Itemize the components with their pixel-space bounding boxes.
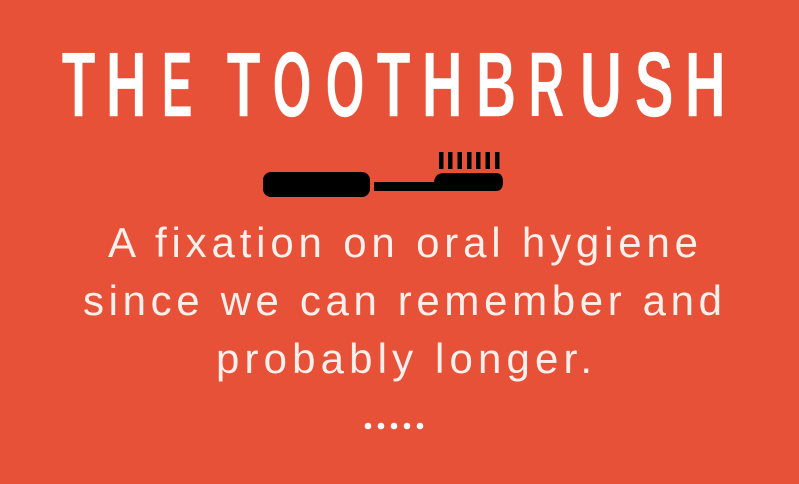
head bbox=[434, 173, 503, 191]
bristles bbox=[439, 152, 500, 169]
neck bbox=[374, 182, 438, 191]
title: B bbox=[476, 34, 516, 137]
subtitle text: A fixation on oral hygiene bbox=[108, 219, 698, 266]
title: E bbox=[162, 32, 193, 137]
icon: toothbrush bbox=[263, 152, 503, 197]
title: H bbox=[106, 33, 147, 137]
subtitle text: since we can remember and bbox=[83, 277, 722, 324]
subtitle text bbox=[83, 219, 722, 382]
dots bbox=[365, 423, 423, 429]
title: T bbox=[226, 34, 261, 137]
title: T bbox=[62, 34, 96, 137]
title: O bbox=[272, 32, 312, 136]
title: H bbox=[685, 33, 726, 137]
title: H bbox=[422, 33, 463, 137]
title: U bbox=[580, 34, 622, 137]
title: S bbox=[635, 34, 674, 137]
subtitle text: probably longer. bbox=[216, 335, 592, 382]
title: O bbox=[326, 32, 365, 136]
title bbox=[62, 32, 726, 137]
title: R bbox=[528, 32, 565, 136]
handle bbox=[263, 172, 370, 197]
title: T bbox=[376, 34, 411, 137]
